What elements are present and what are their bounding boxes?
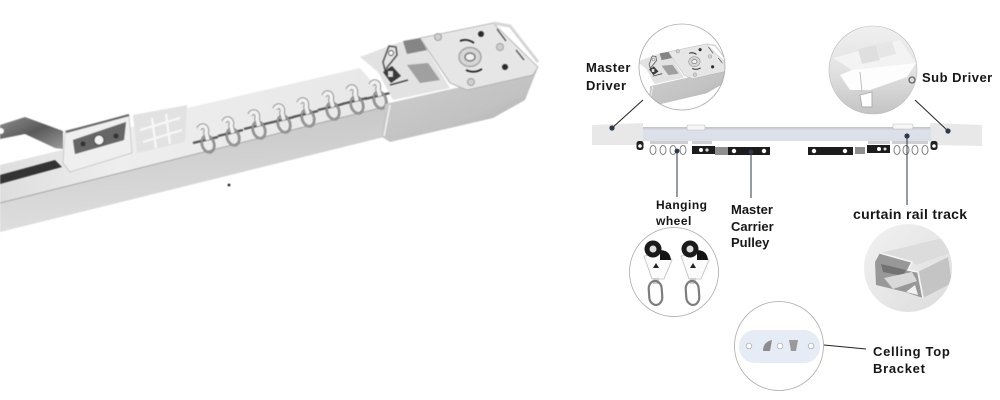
callout: sub driver	[829, 26, 993, 134]
master carrier clip	[63, 115, 132, 172]
master driver leader line	[609, 100, 643, 131]
master carrier pulley label: Master	[731, 202, 773, 217]
right carriage	[893, 124, 913, 129]
rail front face	[0, 105, 392, 232]
product photo: motorised curtain track	[0, 23, 538, 232]
left master carrier	[692, 146, 770, 155]
callout: master driver: Driver	[586, 78, 627, 93]
bracket leader line	[824, 345, 866, 349]
rail top surface	[0, 68, 392, 203]
sub driver leader line	[915, 100, 951, 134]
callout: master carrier pulley: Pulley	[731, 235, 770, 250]
master carrier pulley leader line	[749, 150, 753, 198]
right hanging rings	[894, 146, 928, 154]
left carriage	[687, 125, 705, 130]
callout: curtain rail track	[853, 133, 967, 312]
callout: master carrier pulley	[731, 150, 774, 250]
rail teeth	[650, 141, 928, 144]
right end hook	[930, 141, 938, 150]
curtain rail track leader line	[904, 133, 910, 205]
speck	[228, 184, 230, 186]
sub driver label: Sub Driver	[922, 70, 993, 85]
inner dark slot	[0, 160, 62, 184]
master driver inset circle	[637, 24, 730, 110]
right end block	[930, 123, 982, 146]
left hanging rings	[650, 146, 686, 154]
sub driver inset circle	[829, 26, 917, 114]
curtain rail track label: curtain rail track	[853, 206, 967, 222]
callout: ceiling top bracket	[734, 302, 951, 390]
bracket label: Celling Top	[873, 344, 951, 359]
curtain rail track inset circle	[864, 224, 952, 312]
callout: ceiling top bracket: Bracket	[873, 361, 926, 376]
textured runner block	[133, 105, 187, 153]
hanging wheel inset circle	[630, 228, 718, 316]
hanging wheel label: Hanging	[656, 198, 708, 212]
mounting bracket arm	[0, 117, 63, 149]
hanging hooks	[193, 82, 390, 154]
rail bar	[640, 127, 935, 141]
callout: hanging wheel: wheel	[655, 214, 692, 228]
left end hook	[636, 141, 644, 150]
diagram: curtain rail assembly	[592, 123, 982, 155]
master driver label: Master	[586, 60, 631, 75]
callout: master carrier pulley: Carrier	[731, 219, 774, 234]
callout: master driver	[586, 24, 730, 131]
bracket inset circle	[734, 302, 824, 390]
hanging wheel leader line	[675, 149, 679, 197]
right master carrier	[808, 145, 890, 155]
callout: hanging wheel	[630, 149, 718, 316]
left end block	[592, 123, 643, 145]
master driver head	[360, 23, 538, 142]
